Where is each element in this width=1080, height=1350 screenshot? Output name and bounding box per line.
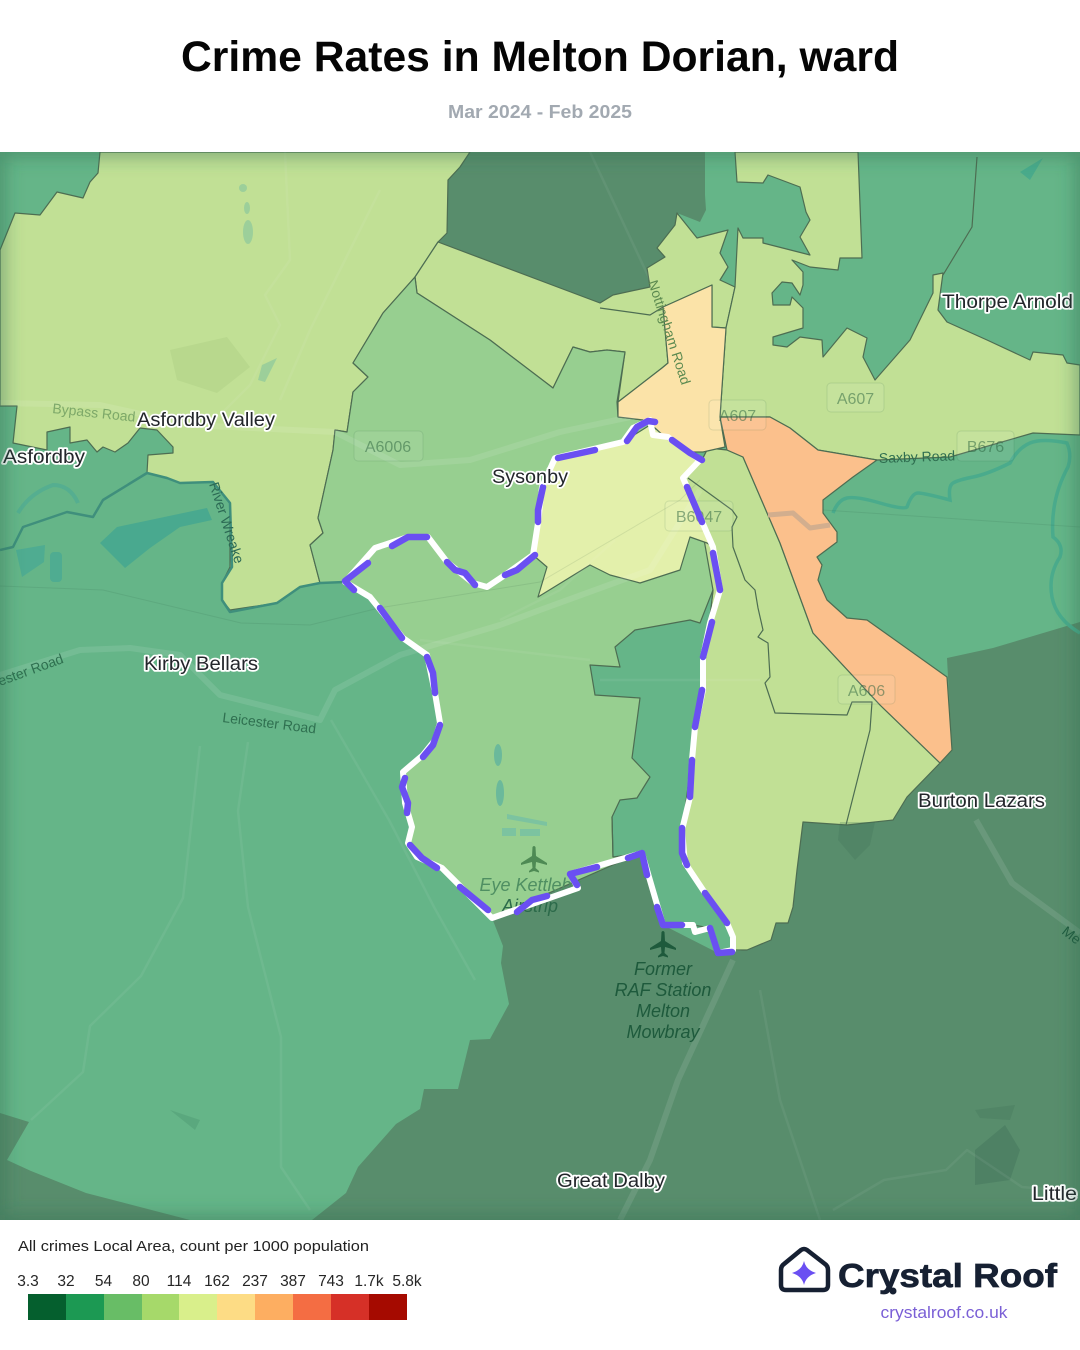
- title: Crime Rates in Melton Dorian, ward: [181, 33, 899, 81]
- airport label: Former RAF Station Melton Mowbray: Mowbray: [626, 1022, 701, 1042]
- area: mid green pocket inside ward: [589, 590, 714, 927]
- road shield: B676: [957, 431, 1014, 461]
- road label: Nottingham Road: Nottingham Road: [645, 278, 694, 387]
- area: dark green south: [312, 622, 1080, 1220]
- legend tick labels: 54: [95, 1273, 112, 1290]
- airport label: Former RAF Station Melton Mowbray: Melton: [636, 1001, 690, 1021]
- road label: Saxby Road: Saxby Road: [879, 447, 955, 466]
- place label: Great Dalby: Great Dalby: [557, 1171, 666, 1192]
- road shield: B676: B676: [967, 439, 1004, 456]
- road shield: A607 centre: [709, 400, 766, 430]
- legend tick labels: 80: [132, 1273, 150, 1290]
- subtitle: date range: Mar 2024 - Feb 2025: [448, 101, 632, 122]
- legend tick labels: 3.3: [17, 1273, 39, 1290]
- roads: [0, 152, 1080, 1220]
- road label: Leicester Road centre: Leicester Road: [222, 709, 317, 736]
- legend tick labels: 387: [280, 1273, 306, 1290]
- area: dark green top centre: [438, 152, 706, 303]
- icon: house with star: [781, 1249, 828, 1290]
- place label: Asfordby Valley: Asfordby Valley: [137, 410, 276, 431]
- airport label: Former RAF Station Melton Mowbray: Former: [634, 959, 693, 979]
- place label: Burton Lazars: Burton Lazars: [918, 791, 1045, 812]
- airport label: Eye Kettleby Airstrip: Eye Kettleby: [479, 875, 582, 895]
- airport label: Former RAF Station Melton Mowbray: [615, 959, 711, 1042]
- road label: River Wreake: River Wreake: [206, 480, 248, 566]
- legend tick labels: [17, 1273, 422, 1290]
- road shield: A6006: A6006: [365, 439, 411, 456]
- area patch: canal across orange strip: [768, 513, 830, 528]
- area: light green west: [0, 152, 470, 610]
- airport label: Former RAF Station Melton Mowbray: RAF Station: [615, 980, 711, 1000]
- panel: choropleth map: [0, 146, 1080, 1226]
- area: light green north band: [415, 213, 735, 402]
- map base: mid green areas: [0, 152, 1080, 1220]
- place label: Little: Little: [1032, 1184, 1077, 1205]
- road shield: B6047: [665, 501, 733, 531]
- logo: Crystal Roof: [781, 1249, 1058, 1322]
- logo wordmark: Crystal Roof: [838, 1257, 1058, 1294]
- legend tick labels: 32: [57, 1273, 75, 1290]
- road shield: A606: A606: [848, 683, 885, 700]
- legend tick labels: 162: [204, 1273, 230, 1290]
- place label: Sysonby: Sysonby: [492, 467, 569, 488]
- legend tick labels: 114: [167, 1273, 192, 1290]
- ward boundary: Melton Dorian: [345, 420, 733, 953]
- airport label: Eye Kettleby Airstrip: [479, 875, 582, 916]
- area: light mid green around ward: [310, 277, 743, 918]
- area: light green east of ward: [682, 448, 940, 950]
- icon: airplane Former RAF Station: [650, 931, 676, 958]
- road shield: A607 north: [827, 383, 884, 412]
- area: orange high crime strip: [720, 417, 952, 763]
- legend colour scale: [28, 1294, 407, 1320]
- legend tick labels: 1.7k: [354, 1273, 384, 1290]
- logo url: crystalroof.co.uk: [880, 1303, 1008, 1322]
- place label: Thorpe Arnold: Thorpe Arnold: [942, 292, 1073, 313]
- area: dark green south west corner: [0, 1113, 190, 1220]
- area: yellow ward north: [533, 425, 713, 597]
- place label: Kirby Bellars: Kirby Bellars: [144, 654, 258, 675]
- legend tick labels: 743: [318, 1273, 344, 1290]
- road shield: A6006: [354, 431, 423, 461]
- area: pale orange town centre: [618, 285, 726, 452]
- icon: airplane Eye Kettleby: [521, 846, 547, 872]
- road shield: A607 north: A607: [837, 391, 874, 408]
- water: rivers, lakes and land patches: [0, 158, 1080, 1185]
- logo keyhole on y descender: [890, 1288, 896, 1294]
- place label: Asfordby: Asfordby: [3, 447, 86, 468]
- legend title: All crimes Local Area, count per 1000 population: [18, 1238, 369, 1255]
- airport label: Eye Kettleby Airstrip: Airstrip: [501, 896, 558, 916]
- legend tick labels: 237: [242, 1273, 268, 1290]
- legend tick labels: 5.8k: [392, 1273, 422, 1290]
- ward and LSOA thin boundary lines: [600, 157, 977, 857]
- legend: [17, 1238, 422, 1320]
- road shield: A607 centre: A607: [719, 408, 756, 425]
- area: light green north east: [720, 152, 1080, 460]
- road label: Bypass Road: Bypass Road: [52, 400, 136, 425]
- map edge vignette: [0, 146, 1080, 1226]
- road shield: A606: [838, 675, 895, 704]
- road shield: B6047: B6047: [676, 509, 722, 526]
